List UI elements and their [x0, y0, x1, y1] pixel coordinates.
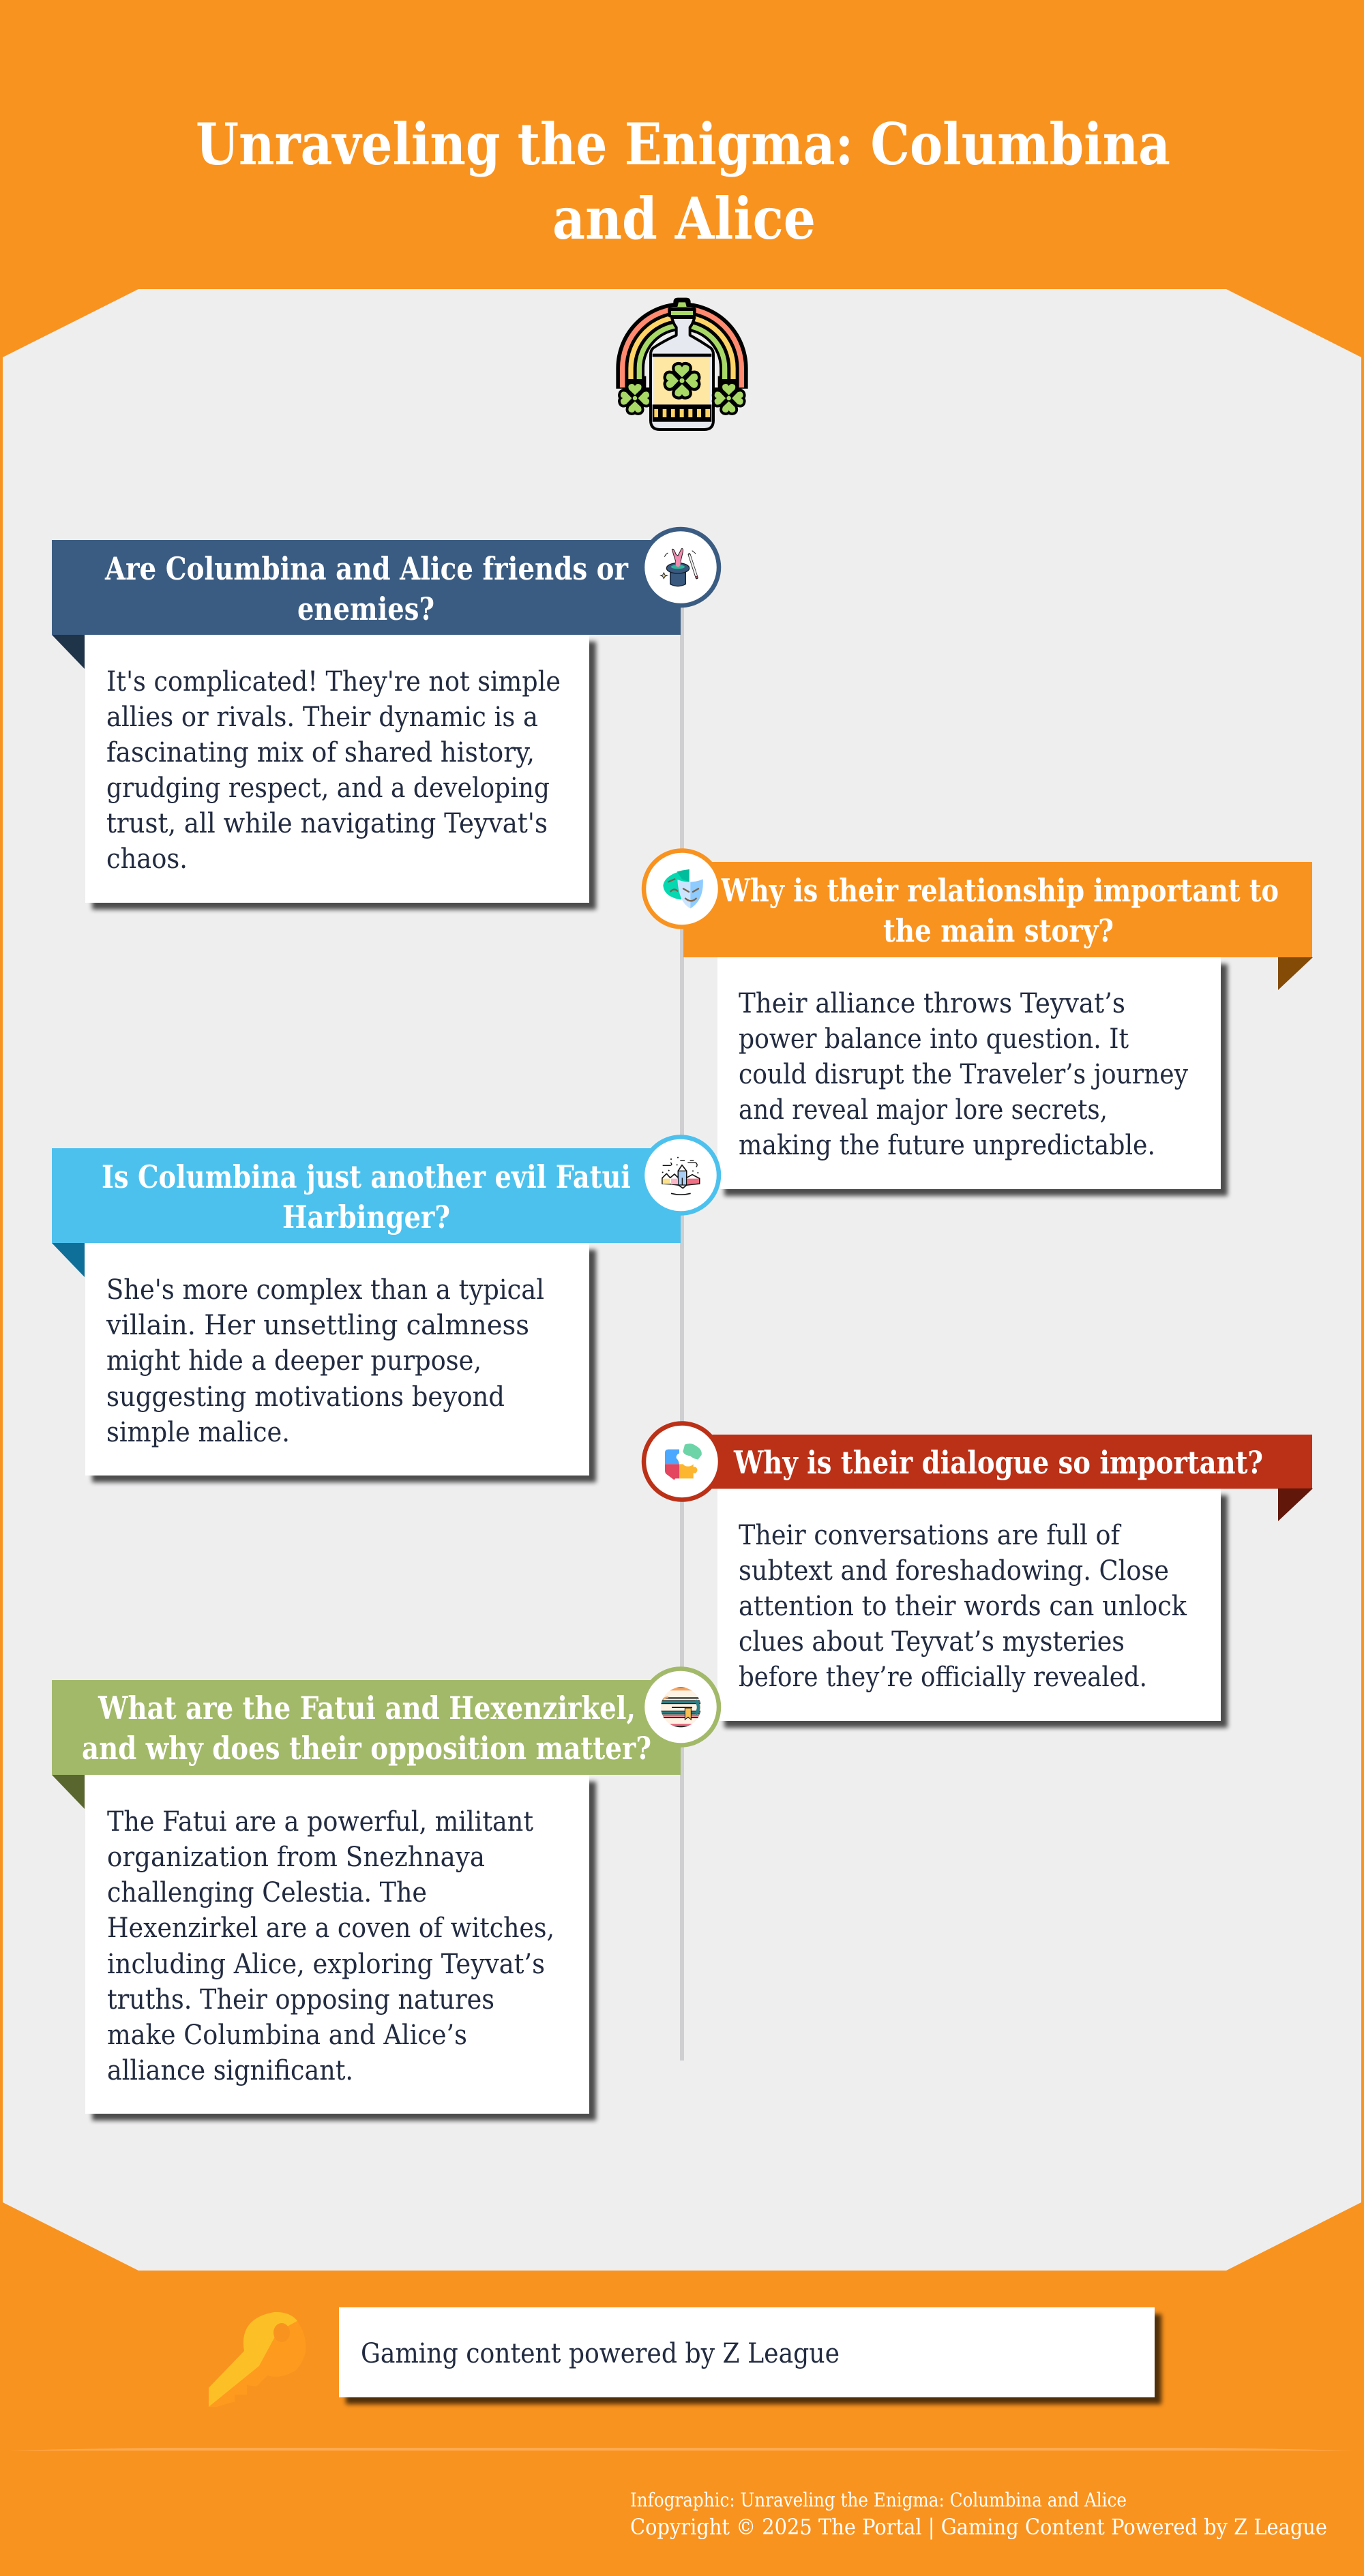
heading: question 1: Are Columbina and Alice friends or — [104, 550, 629, 587]
text: answer 2: could disrupt the Traveler’s journey — [739, 1059, 1188, 1090]
text: answer 5: challenging Celestia. The — [107, 1877, 427, 1908]
text: answer 4: Their conversations are full of — [739, 1520, 1122, 1551]
fold: question 4 — [1278, 1488, 1313, 1521]
text: answer 4 — [739, 1520, 1187, 1693]
panel: question 4 — [683, 1435, 1313, 1728]
icon: books badge — [642, 1669, 719, 1746]
fold: question 5 — [52, 1775, 85, 1809]
text: answer 2 — [739, 988, 1188, 1161]
text: answer 4: clues about Teyvat’s mysteries — [739, 1626, 1125, 1658]
heading: question 2: the main story? — [883, 912, 1114, 949]
heading: question 3: Is Columbina just another evil Fatui — [102, 1158, 631, 1195]
text: answer 5: including Alice, exploring Teyvat’s — [107, 1949, 545, 1980]
heading: question 5: and why does their opposition matter? — [82, 1730, 651, 1767]
icon: castle badge — [642, 1137, 719, 1214]
footer text — [630, 2489, 1327, 2540]
heading: question 5 — [82, 1690, 651, 1767]
text: answer 2: Their alliance throws Teyvat’s — [739, 988, 1125, 1019]
title — [196, 110, 1170, 252]
text: answer 4: subtext and foreshadowing. Close — [739, 1555, 1169, 1587]
banner: question 1 — [52, 540, 681, 635]
icon: magic hat badge — [642, 529, 719, 605]
text: answer 3: villain. Her unsettling calmness — [106, 1310, 529, 1341]
icon: bottle with rainbow and clovers — [616, 298, 748, 430]
callout: powered by: Gaming content powered by Z League — [361, 2338, 840, 2369]
text: answer 1: allies or rivals. Their dynamic is a — [106, 702, 538, 733]
panel: question 5 — [52, 1680, 681, 2121]
text: answer 1: chaos. — [106, 843, 188, 875]
banner: question 5 — [52, 1680, 681, 1775]
timeline line — [680, 545, 684, 2061]
heading: question 1 — [104, 550, 629, 627]
text: answer 2: power balance into question. It — [739, 1023, 1129, 1055]
text: answer 3: simple malice. — [106, 1417, 290, 1448]
icon: key — [209, 2312, 306, 2407]
text: answer 5: The Fatui are a powerful, militant — [107, 1806, 533, 1838]
text: answer 3: might hide a deeper purpose, — [106, 1345, 481, 1377]
title: Unraveling the Enigma: Columbina — [196, 110, 1170, 178]
text: answer 2: making the future unpredictable. — [739, 1130, 1155, 1161]
text: answer 5: organization from Snezhnaya — [107, 1842, 485, 1873]
fold: question 2 — [1278, 957, 1313, 990]
text: answer 5: make Columbina and Alice’s — [107, 2020, 467, 2051]
text: answer 1: fascinating mix of shared history, — [106, 737, 535, 768]
title: and Alice — [552, 185, 816, 252]
text: answer 5: alliance significant. — [107, 2055, 353, 2086]
text: answer 5 — [107, 1806, 554, 2086]
heading: question 3: Harbinger? — [282, 1199, 450, 1235]
text: answer 1: grudging respect, and a developing — [106, 773, 550, 804]
text: answer 5: Hexenzirkel are a coven of witches, — [107, 1913, 554, 1944]
text: answer 2: and reveal major lore secrets, — [739, 1094, 1108, 1126]
panel: question 2 — [683, 862, 1313, 1196]
fold: question 3 — [52, 1243, 85, 1277]
icon: theatre masks badge — [644, 851, 720, 927]
heading: question 1: enemies? — [297, 590, 434, 627]
banner: question 4 — [683, 1435, 1312, 1489]
panel: question 3 — [52, 1148, 681, 1482]
footer text: Infographic: Unraveling the Enigma: Columbina and Alice — [630, 2489, 1127, 2511]
text: answer 1: trust, all while navigating Teyvat's — [106, 808, 548, 839]
text: answer 3: She's more complex than a typical — [106, 1274, 544, 1306]
heading: question 2 — [720, 872, 1279, 949]
callout: powered by — [339, 2307, 1161, 2404]
banner: question 2 — [683, 862, 1312, 957]
heading: question 3 — [102, 1158, 631, 1235]
text: answer 1 — [106, 666, 561, 875]
text: answer 1: It's complicated! They're not simple — [106, 666, 561, 698]
icon: puzzle badge — [644, 1424, 720, 1500]
panel: question 1 — [52, 540, 681, 910]
banner: question 3 — [52, 1148, 681, 1243]
fold: question 1 — [52, 635, 85, 669]
text: answer 3 — [106, 1274, 544, 1448]
text: answer 4: before they’re officially revealed. — [739, 1662, 1147, 1693]
panel: main content area — [3, 289, 1361, 2271]
heading: question 5: What are the Fatui and Hexenzirkel, — [98, 1690, 636, 1726]
heading: question 4: Why is their dialogue so important? — [733, 1444, 1263, 1481]
text: answer 3: suggesting motivations beyond — [106, 1381, 505, 1413]
text: answer 4: attention to their words can unlock — [739, 1591, 1187, 1622]
text: answer 5: truths. Their opposing natures — [107, 1984, 494, 2016]
